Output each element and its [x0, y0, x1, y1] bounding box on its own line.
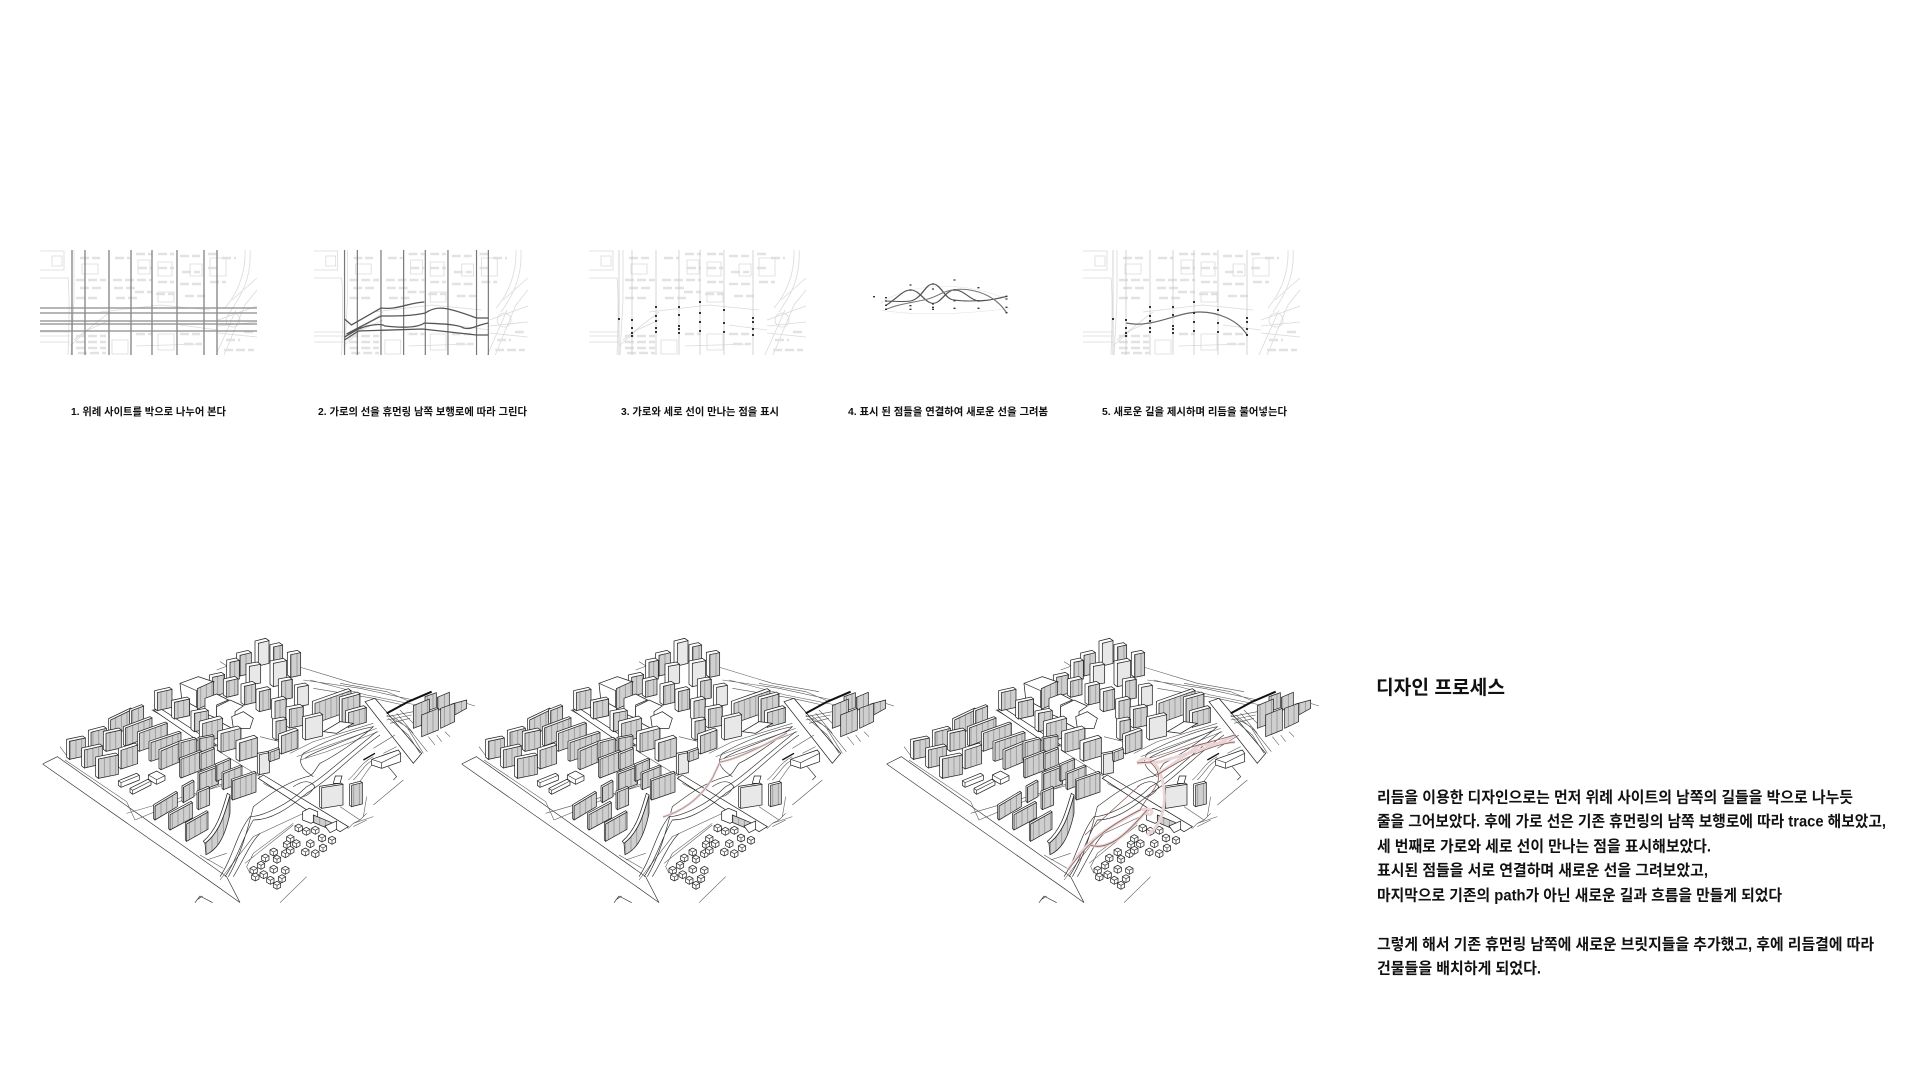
map 3: intersection points	[589, 250, 806, 355]
description text block: 줄을 그어보았다. 후에 가로 선은 기존 휴먼링의 남쪽 보행로에 따라 trace 해보았고,	[1377, 812, 1886, 830]
description text block: 마지막으로 기존의 path가 아닌 새로운 길과 흐름을 만들게 되었다	[1377, 886, 1782, 904]
3D site model 3 with red bridges	[887, 638, 1319, 903]
caption 1: 1. 위례 사이트를 박으로 나누어 본다	[71, 405, 226, 418]
caption 3: 3. 가로와 세로 선이 만나는 점을 표시	[621, 405, 779, 418]
description text block: 건물들을 배치하게 되었다.	[1377, 960, 1541, 978]
caption 2: 2. 가로의 선을 휴먼링 남쪽 보행로에 따라 그린다	[318, 405, 527, 418]
description text block	[1377, 788, 1886, 978]
3D site model 2 with bridge sketches	[462, 638, 894, 903]
description text block: 리듬을 이용한 디자인으로는 먼저 위례 사이트의 남쪽의 길들을 박으로 나누듯	[1377, 788, 1853, 806]
map 4: points connected with new lines	[873, 279, 1010, 314]
map 5: new path with rhythm	[1083, 250, 1300, 355]
title: 디자인 프로세스	[1376, 677, 1505, 699]
step diagrams row	[40, 250, 1300, 418]
caption 4: 4. 표시 된 점들을 연결하여 새로운 선을 그려봄	[848, 405, 1048, 418]
map 2: traced pedestrian lines	[314, 250, 528, 355]
3D site model 1	[43, 638, 475, 903]
description text block: 그렇게 해서 기존 휴먼링 남쪽에 새로운 브릿지들을 추가했고, 후에 리듬결에 따라	[1377, 936, 1874, 954]
caption 5: 5. 새로운 길을 제시하며 리듬을 불어넣는다	[1102, 405, 1287, 418]
description text block: 세 번째로 가로와 세로 선이 만나는 점을 표시해보았다.	[1377, 838, 1711, 856]
map 1: site divided by grid	[40, 250, 257, 355]
description text block: 표시된 점들을 서로 연결하며 새로운 선을 그려보았고,	[1377, 862, 1708, 880]
